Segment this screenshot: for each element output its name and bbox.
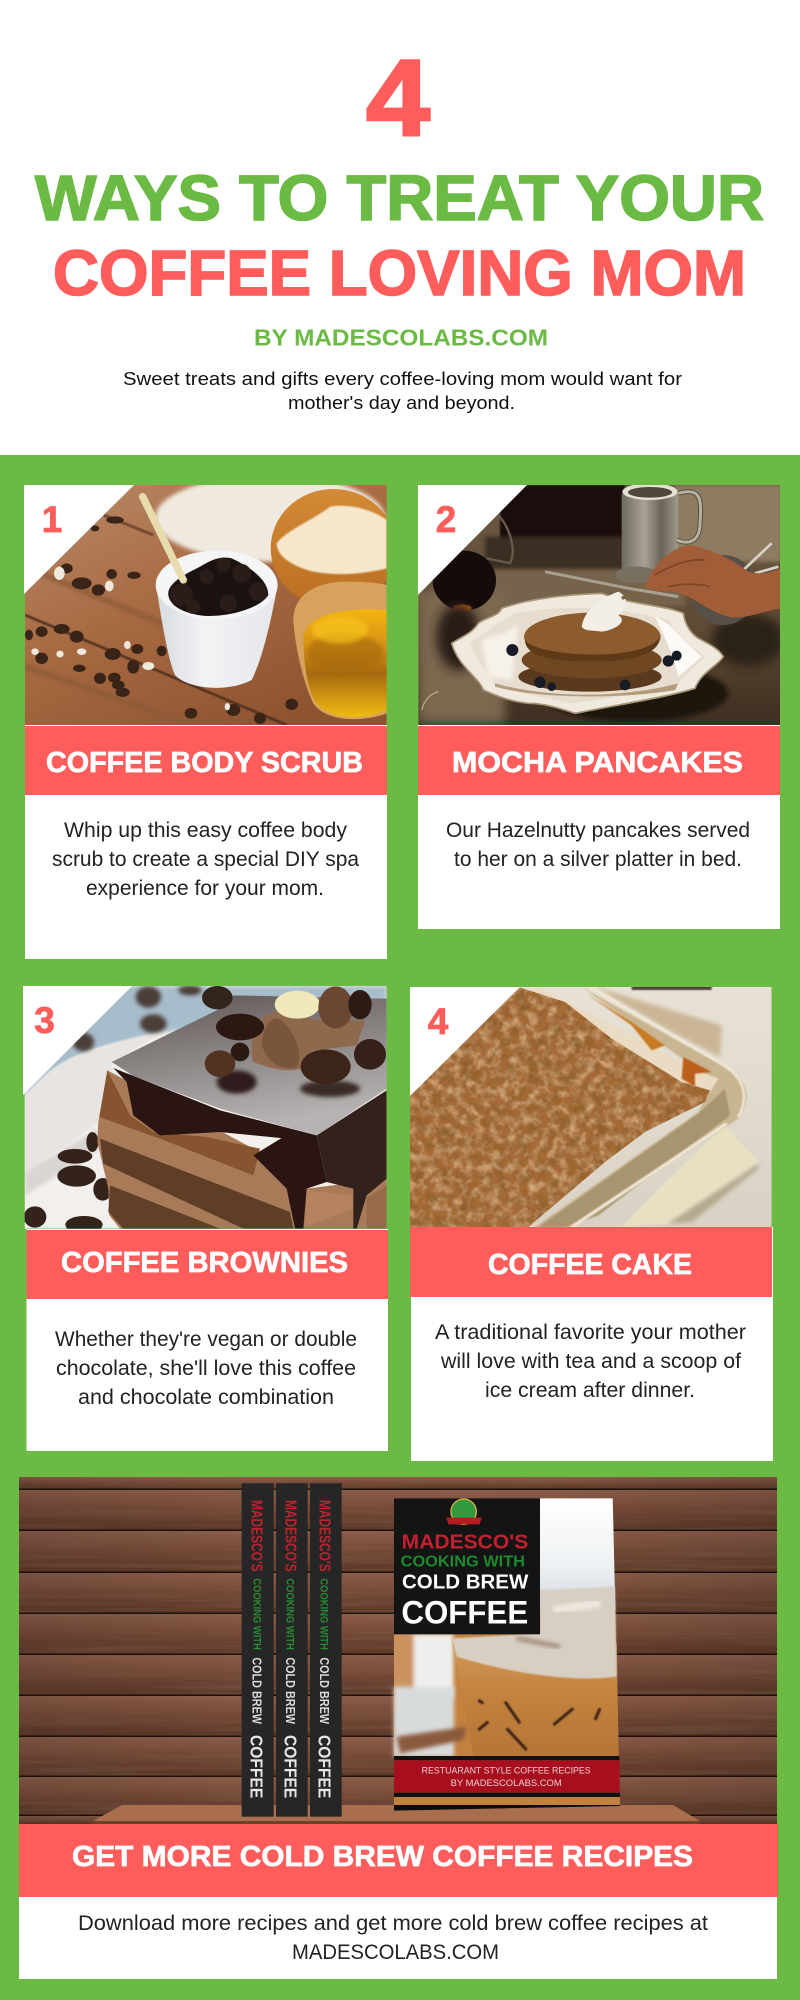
intro text: Sweet treats and gifts every coffee-loving mom would want for — [123, 368, 682, 389]
heading band — [410, 1227, 772, 1297]
description: chocolate, she'll love this coffee — [56, 1357, 356, 1380]
panel: cold brew coffee recipes — [19, 1477, 778, 1979]
cake sponge layers — [97, 1070, 387, 1229]
number badge 3: 3 — [34, 1000, 55, 1041]
book spines: MADESCO'S — [315, 1500, 332, 1572]
photo: bookshelf with books — [19, 1477, 777, 1824]
heading band: GET MORE COLD BREW COFFEE RECIPES — [72, 1841, 693, 1873]
description: MADESCOLABS.COM — [292, 1941, 499, 1964]
number badge 2: 2 — [436, 499, 456, 540]
heading band — [418, 726, 780, 795]
title number 4: 4 — [366, 37, 430, 159]
description — [446, 819, 750, 871]
book spines: COLD BREW — [250, 1657, 265, 1724]
panel: card 4 coffee cake — [410, 984, 773, 1461]
description — [52, 819, 359, 900]
baking dish glass — [535, 987, 747, 1227]
book front cover: BY MADESCOLABS.COM — [451, 1778, 562, 1788]
photo: coffee brownies — [24, 985, 387, 1233]
number badge 1: 1 — [42, 499, 62, 540]
description: Our Hazelnutty pancakes served — [446, 819, 750, 842]
heading band — [19, 1824, 778, 1897]
description — [55, 1328, 357, 1409]
book spines: MADESCO'S — [281, 1500, 298, 1572]
book spines: COFFEE — [280, 1735, 300, 1798]
description — [435, 1321, 746, 1402]
number badge 4 — [410, 987, 520, 1096]
panel: card 1 coffee body scrub — [24, 475, 396, 959]
photo: coffee cake — [410, 984, 772, 1227]
panel: card 3 coffee brownies — [23, 985, 388, 1451]
photo: mocha pancakes — [418, 483, 785, 725]
panel: card 2 mocha pancakes — [418, 483, 785, 929]
description: Whip up this easy coffee body — [64, 819, 348, 842]
heading band — [25, 726, 387, 795]
description: A traditional favorite your mother — [435, 1321, 746, 1344]
photo: coffee body scrub — [25, 475, 396, 725]
book spines — [242, 1483, 342, 1817]
wood planks — [19, 1477, 777, 1824]
book spines: MADESCO'S — [248, 1500, 265, 1572]
description: and chocolate combination — [78, 1386, 334, 1409]
number badge 1 — [24, 485, 134, 594]
heading band: COFFEE BROWNIES — [61, 1247, 348, 1279]
number badge 4: 4 — [428, 1001, 449, 1042]
description: Whether they're vegan or double — [55, 1328, 357, 1351]
intro text — [123, 368, 682, 413]
book front cover: COOKING WITH — [401, 1553, 525, 1570]
book spines: COFFEE — [314, 1735, 334, 1798]
shelf — [93, 1805, 700, 1821]
title line: coffee loving mom: COFFEE LOVING MOM — [53, 237, 746, 309]
heading band: COFFEE BODY SCRUB — [46, 747, 363, 779]
description: to her on a silver platter in bed. — [454, 848, 742, 871]
book front cover: COLD BREW — [402, 1571, 529, 1594]
chocolate ganache — [114, 1068, 316, 1138]
book spines: COLD BREW — [283, 1657, 298, 1724]
book front cover — [394, 1498, 620, 1811]
heading band — [26, 1230, 388, 1299]
description: ice cream after dinner. — [485, 1379, 695, 1402]
intro text: mother's day and beyond. — [288, 392, 515, 413]
description: Download more recipes and get more cold brew coffee recipes at — [78, 1912, 708, 1935]
byline: BY MADESCOLABS.COM — [254, 324, 548, 350]
description — [78, 1912, 708, 1964]
green background panel — [0, 455, 800, 2000]
publisher logo — [446, 1499, 482, 1524]
book spines: COOKING WITH — [318, 1578, 330, 1650]
book front cover: MADESCO'S — [402, 1531, 528, 1554]
heading band: COFFEE CAKE — [488, 1249, 692, 1281]
heading band: MOCHA PANCAKES — [452, 747, 743, 779]
description: experience for your mom. — [86, 877, 324, 900]
cake crumb topping — [410, 987, 710, 1227]
header — [35, 37, 764, 413]
description: will love with tea and a scoop of — [440, 1350, 741, 1373]
book spines: COFFEE — [247, 1735, 267, 1798]
description: scrub to create a special DIY spa — [52, 848, 359, 871]
book spines: COOKING WITH — [284, 1578, 296, 1650]
book front cover: COFFEE — [401, 1593, 528, 1630]
book spines: COOKING WITH — [251, 1578, 263, 1650]
number badge 2 — [418, 485, 527, 595]
number badge 3 — [23, 986, 132, 1095]
book spines: COLD BREW — [317, 1657, 332, 1724]
book front cover: RESTUARANT STYLE COFFEE RECIPES — [422, 1766, 591, 1776]
title line: ways to treat your: WAYS TO TREAT YOUR — [35, 162, 764, 234]
